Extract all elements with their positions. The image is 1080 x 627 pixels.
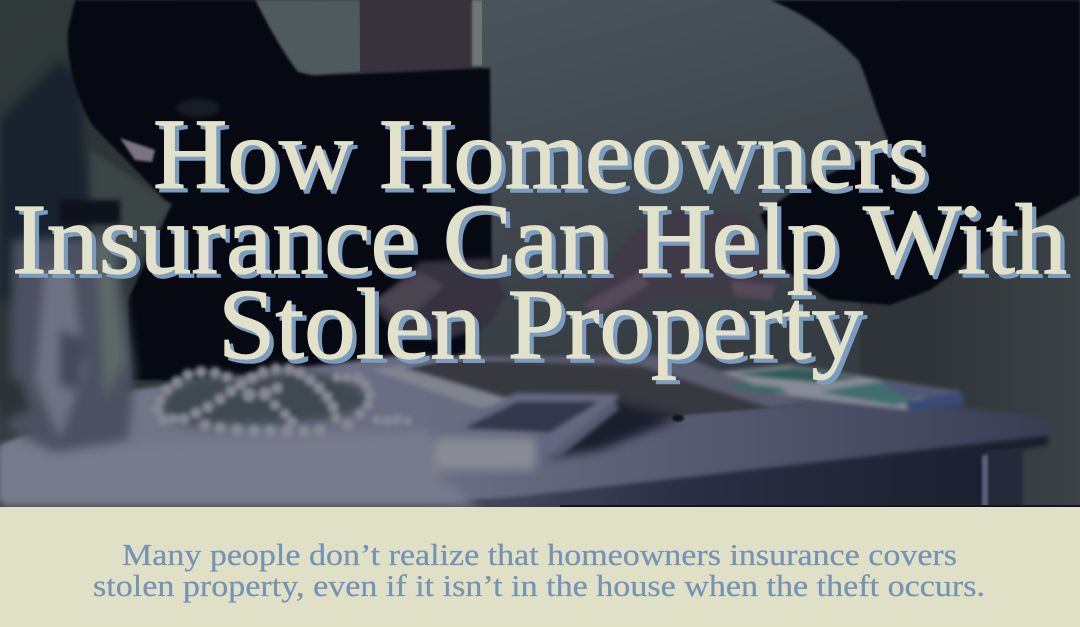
cash stack — [720, 365, 965, 412]
desk front — [450, 436, 1048, 507]
pearl necklace — [152, 363, 412, 437]
title shadow: Stolen Property — [222, 272, 868, 384]
second hand fingers — [582, 272, 775, 315]
door edge — [472, 0, 484, 66]
title text: Stolen Property — [218, 268, 864, 380]
raised sleeve and shoulder at right — [760, 0, 1080, 305]
paper edge — [372, 366, 520, 408]
lit wall beside the shoulder — [90, 150, 172, 260]
title shadow: How Homeowners — [157, 102, 932, 214]
near hand — [372, 258, 505, 340]
dark wall band — [860, 270, 922, 390]
dark screw on tablet edge — [672, 414, 684, 422]
title — [12, 98, 1071, 384]
caption band — [0, 507, 1080, 627]
phone shadow — [548, 402, 680, 458]
exposed skin under mask — [120, 138, 155, 162]
caption text: Many people don’t realize that homeowners insurance covers — [122, 537, 957, 572]
paper edge two — [420, 355, 805, 408]
pearl necklace: dark green interior — [162, 372, 368, 426]
title text: How Homeowners — [153, 98, 928, 210]
glass vase — [0, 235, 135, 452]
dark strip along the bottom right of the photo — [560, 505, 1080, 507]
title shadow: Insurance Can Help With — [16, 187, 1071, 299]
blurred blue object at left — [0, 60, 90, 300]
burglar body and balaclava — [68, 0, 492, 380]
title shadow — [16, 102, 1071, 384]
tablet and papers — [395, 358, 805, 418]
wall behind the burglar's head — [255, 0, 362, 75]
phone — [455, 393, 620, 458]
white paper under phone — [434, 438, 536, 470]
desk leg — [985, 450, 1023, 507]
left wall — [0, 0, 360, 400]
brown door panel — [360, 0, 472, 72]
second hand — [582, 210, 775, 315]
desk leg highlight — [982, 455, 988, 507]
right lower wall — [920, 195, 1080, 507]
centre wall — [482, 0, 902, 380]
title text — [12, 98, 1067, 380]
caption text: stolen property, even if it isn’t in the house when the theft occurs. — [93, 568, 985, 603]
left desk tint — [0, 430, 480, 507]
near hand highlight — [375, 272, 445, 322]
desk top — [0, 355, 1050, 500]
dark item on shelf — [60, 200, 120, 224]
title text: Insurance Can Help With — [12, 183, 1067, 295]
caption text — [93, 537, 985, 603]
eye — [176, 99, 220, 117]
